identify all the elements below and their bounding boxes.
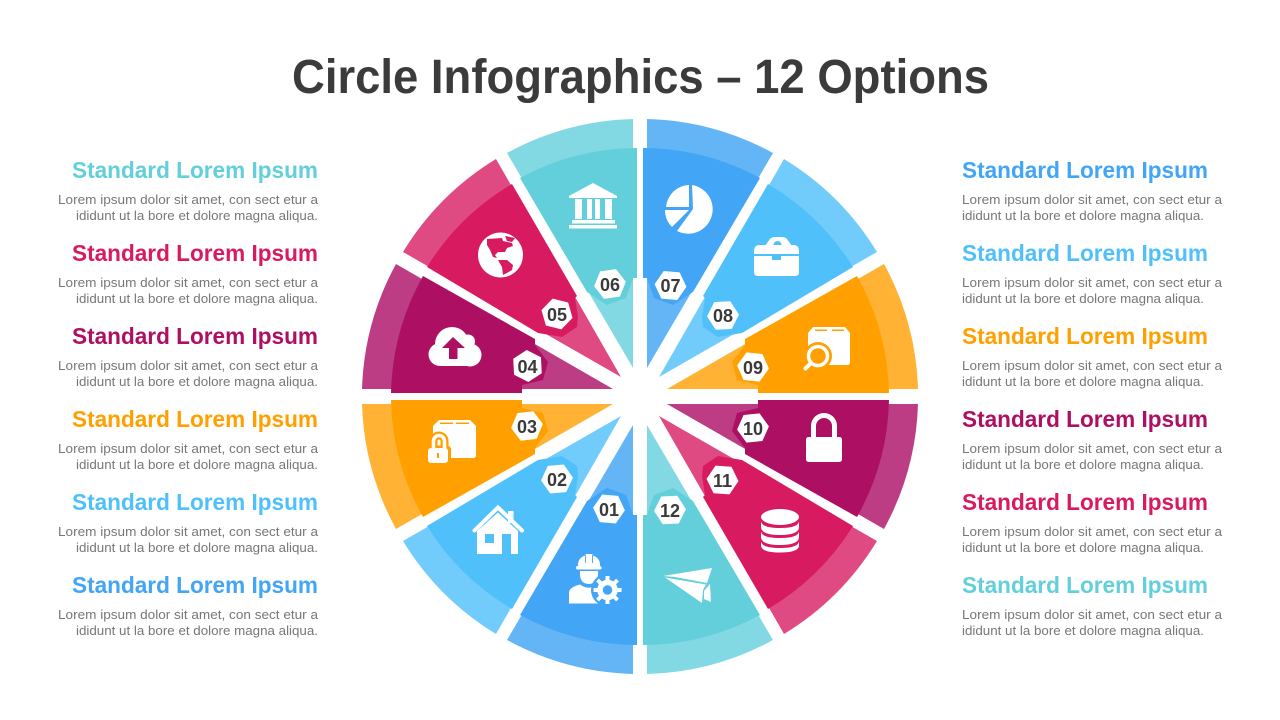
segment 12: 12: [660, 501, 680, 521]
icon: box with magnifier: [804, 327, 850, 370]
text block 09: ididunt ut la bore et dolore magna aliqua.: [962, 375, 1204, 389]
segment 05: [403, 159, 621, 377]
text block 06: Standard Lorem Ipsum: [72, 157, 318, 183]
segment 04: 04: [517, 357, 538, 377]
icon: pie chart: [665, 185, 713, 234]
text block 03: Standard Lorem Ipsum: [72, 406, 318, 432]
left text list: [58, 157, 318, 638]
text block 08: Lorem ipsum dolor sit amet, con sect etur a: [962, 276, 1222, 290]
text block 08: Standard Lorem Ipsum: [962, 240, 1208, 266]
text block 03: Lorem ipsum dolor sit amet, con sect etur a: [58, 442, 318, 456]
text block 09: [962, 323, 1222, 389]
text block 05: [58, 240, 318, 306]
icon: bank building: [569, 183, 617, 228]
text block 05: ididunt ut la bore et dolore magna aliqua.: [76, 292, 318, 306]
icon: globe: [478, 232, 523, 278]
text block 05: Standard Lorem Ipsum: [72, 240, 318, 266]
icon: house: [474, 508, 522, 554]
icon: cloud upload: [428, 327, 482, 366]
icon: padlock: [806, 416, 842, 462]
text block 04: [58, 323, 318, 389]
title: Circle Infographics – 12 Options: [292, 51, 989, 104]
text block 06: [58, 157, 318, 223]
segment 05: 05: [547, 305, 567, 325]
text block 12: Lorem ipsum dolor sit amet, con sect etur a: [962, 608, 1222, 622]
icon: toolbox: [754, 237, 799, 276]
text block 10: ididunt ut la bore et dolore magna aliqua.: [962, 458, 1204, 472]
icon: worker with gear: [569, 554, 624, 606]
text block 08: ididunt ut la bore et dolore magna aliqua.: [962, 292, 1204, 306]
text block 11: [962, 489, 1222, 555]
text block 08: [962, 240, 1222, 306]
segment 03: 03: [517, 417, 537, 437]
segment 01: [507, 425, 637, 674]
segment 12: [643, 425, 773, 674]
text block 03: ididunt ut la bore et dolore magna aliqua.: [76, 458, 318, 472]
text block 01: Lorem ipsum dolor sit amet, con sect etur a: [58, 608, 318, 622]
segment 10: 10: [743, 419, 763, 439]
text block 04: ididunt ut la bore et dolore magna aliqua.: [76, 375, 318, 389]
right text list: [962, 157, 1222, 638]
segment 08: 08: [713, 306, 733, 326]
segment 11: [659, 416, 877, 634]
text block 01: [58, 572, 318, 638]
text block 07: ididunt ut la bore et dolore magna aliqua.: [962, 209, 1204, 223]
segment 07: [643, 119, 773, 368]
text block 02: ididunt ut la bore et dolore magna aliqua.: [76, 541, 318, 555]
text block 06: Lorem ipsum dolor sit amet, con sect etur a: [58, 193, 318, 207]
icon: box with padlock: [426, 420, 476, 466]
text block 07: [962, 157, 1222, 223]
text block 09: Lorem ipsum dolor sit amet, con sect etur a: [962, 359, 1222, 373]
segment 08: [659, 159, 877, 377]
segment 04: [362, 264, 613, 393]
text block 02: [58, 489, 318, 555]
text block 11: ididunt ut la bore et dolore magna aliqua.: [962, 541, 1204, 555]
text block 12: Standard Lorem Ipsum: [962, 572, 1208, 598]
segment 09: [667, 264, 918, 393]
segment 02: [403, 416, 621, 634]
circle diagram: [362, 119, 918, 674]
text block 07: Standard Lorem Ipsum: [962, 157, 1208, 183]
text block 06: ididunt ut la bore et dolore magna aliqua.: [76, 209, 318, 223]
segment 10: [667, 400, 918, 529]
segment 06: 06: [600, 275, 620, 295]
text block 10: Lorem ipsum dolor sit amet, con sect etur a: [962, 442, 1222, 456]
text block 10: Standard Lorem Ipsum: [962, 406, 1208, 432]
text block 09: Standard Lorem Ipsum: [962, 323, 1208, 349]
segment 06: [507, 119, 637, 368]
text block 11: Standard Lorem Ipsum: [962, 489, 1208, 515]
text block 10: [962, 406, 1222, 472]
text block 03: [58, 406, 318, 472]
icon: database: [761, 509, 799, 552]
segment 11: 11: [713, 471, 732, 491]
segment 09: 09: [743, 358, 763, 378]
segment 01: 01: [599, 500, 619, 520]
segment 02: 02: [547, 470, 567, 490]
text block 04: Standard Lorem Ipsum: [72, 323, 318, 349]
text block 01: ididunt ut la bore et dolore magna aliqua.: [76, 624, 318, 638]
text block 01: Standard Lorem Ipsum: [72, 572, 318, 598]
icon: paper plane: [663, 568, 712, 603]
text block 02: Lorem ipsum dolor sit amet, con sect etur a: [58, 525, 318, 539]
text block 02: Standard Lorem Ipsum: [72, 489, 318, 515]
text block 12: ididunt ut la bore et dolore magna aliqua.: [962, 624, 1204, 638]
text block 12: [962, 572, 1222, 638]
text block 04: Lorem ipsum dolor sit amet, con sect etur a: [58, 359, 318, 373]
text block 07: Lorem ipsum dolor sit amet, con sect etur a: [962, 193, 1222, 207]
segment 07: 07: [660, 276, 681, 296]
text block 05: Lorem ipsum dolor sit amet, con sect etur a: [58, 276, 318, 290]
text block 11: Lorem ipsum dolor sit amet, con sect etur a: [962, 525, 1222, 539]
segment 03: [362, 400, 613, 529]
